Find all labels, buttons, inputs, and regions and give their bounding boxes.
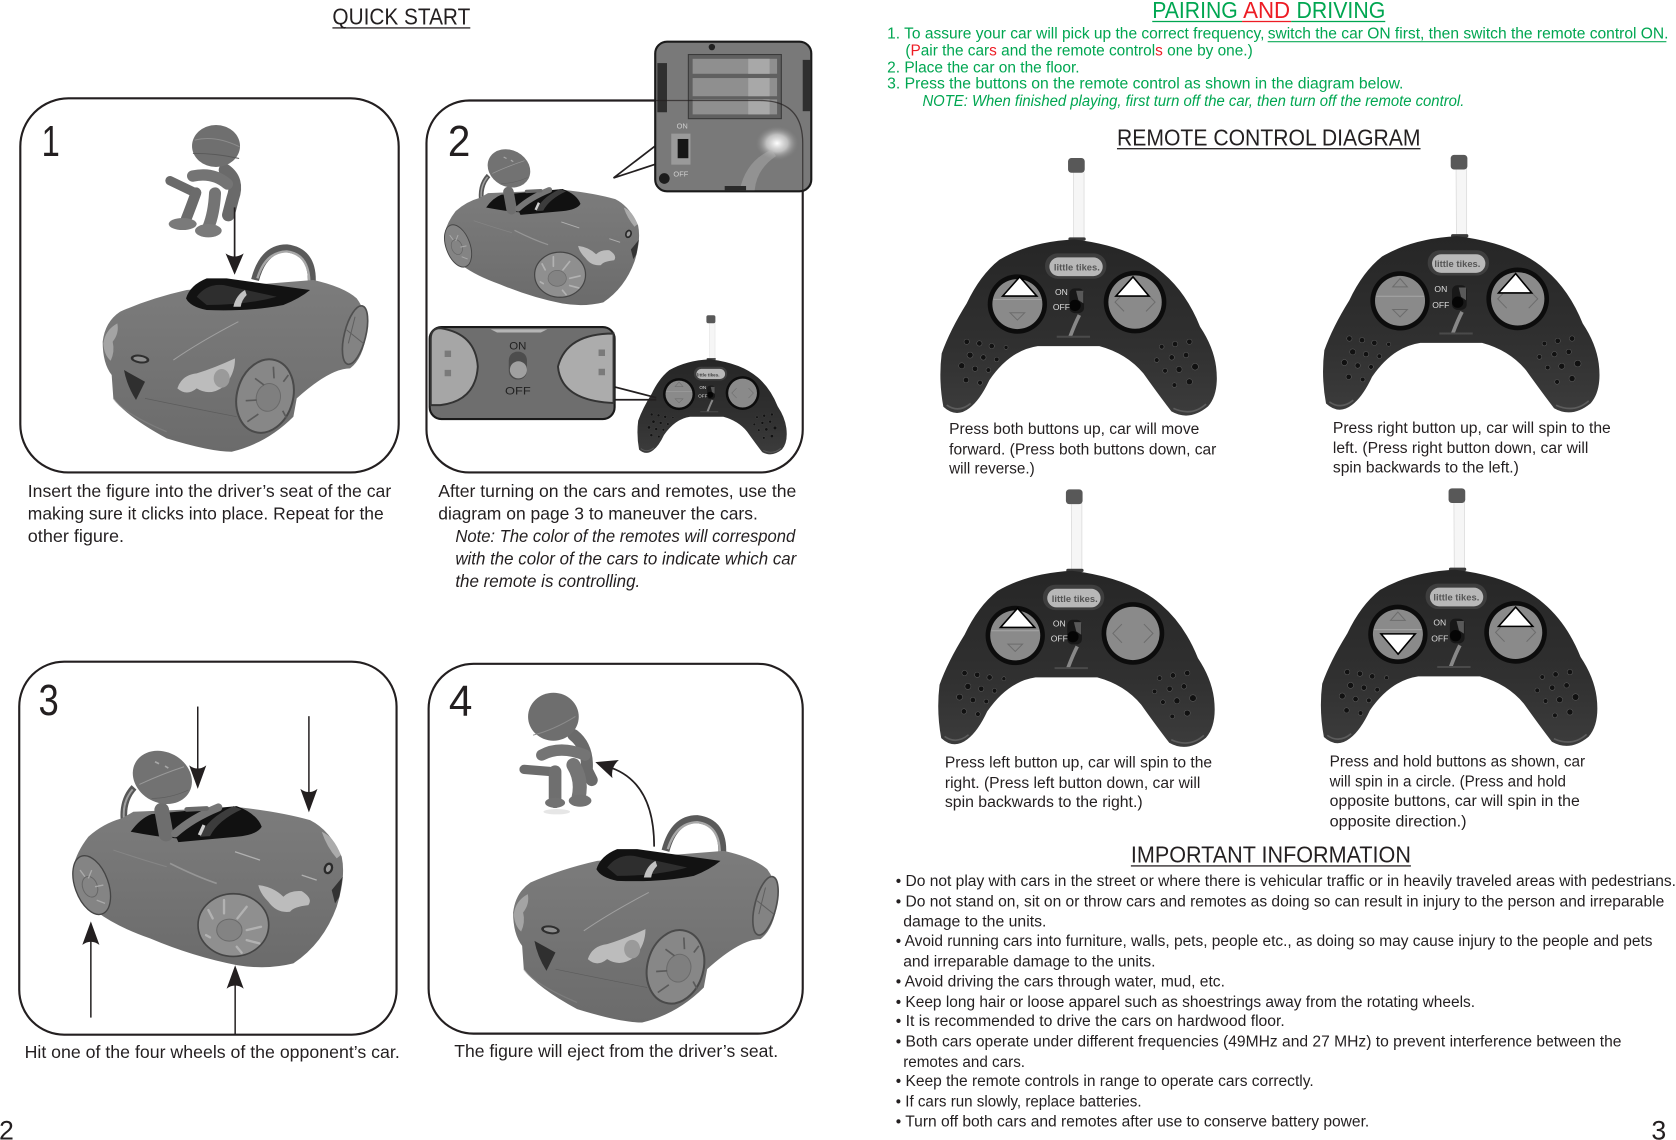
text: remote 4 caption: opposite buttons, car will spin in the [1330, 792, 1580, 810]
remote, step 2: OFF [698, 393, 708, 398]
heading: important information: IMPORTANT INFORMATION [1131, 842, 1411, 868]
text: remote 2 caption: Press right button up, car will spin to the [1333, 419, 1611, 437]
text: important information list: • Do not play with cars in the street or where there is vehicular traffic or in heavily traveled areas with pedestrians. [896, 872, 1676, 890]
text: remote 4 caption: will spin in a circle. (Press and hold [1329, 773, 1566, 791]
remote: left down, right up: OFF [1431, 633, 1448, 643]
remote: both buttons up: ON [1055, 287, 1068, 297]
text: step 2 caption: the remote is controlling. [455, 571, 640, 591]
arrows: four wheels [82, 707, 317, 1035]
text: important information list: • It is recommended to drive the cars on hardwood floor. [896, 1012, 1285, 1030]
text: pairing steps [887, 25, 1669, 110]
inset: battery compartment and switch [655, 42, 811, 191]
callout lines: battery inset [614, 144, 657, 178]
text: pairing steps: switch the car ON first, then switch the remote control ON. [1268, 25, 1669, 43]
car, step 4 [513, 819, 783, 1023]
arrow: figure into seat [226, 207, 244, 275]
text: important information list: remotes and cars. [903, 1053, 1025, 1071]
text: important information list: • If cars run slowly, replace batteries. [896, 1092, 1142, 1110]
panel 2 border showing through inset [655, 100, 803, 191]
text: step 2 caption: with the color of the cars to indicate which car [455, 548, 797, 568]
step number 4: 4 [449, 677, 472, 726]
text: step 4 caption: The figure will eject from the driver’s seat. [454, 1041, 778, 1061]
inset: remote on/off switch: OFF [505, 385, 531, 397]
text: step 1 caption: other figure. [28, 526, 124, 546]
panel: step 3 [19, 662, 397, 1035]
remote: right button up: OFF [1432, 300, 1449, 310]
callout lines: switch inset [615, 387, 656, 400]
text: important information list: • Turn off both cars and remotes after use to conserve battery power. [896, 1113, 1369, 1131]
panel: step 4 [429, 664, 803, 1034]
text: pairing steps: 1. To assure your car will pick up the correct frequency, [887, 25, 1264, 43]
text: important information list: • Keep long hair or loose apparel such as shoestrings away from the rotating wheels. [896, 993, 1475, 1011]
text: important information list [896, 872, 1676, 1131]
inset: remote on/off switch: ON [509, 341, 526, 353]
remote: right button up: ON [1434, 284, 1447, 294]
text: remote 4 caption [1329, 752, 1586, 830]
remote: both buttons up: OFF [1053, 302, 1070, 312]
remote: both buttons up: little tikes. [1054, 262, 1100, 273]
text: pairing steps: NOTE: When finished playing, first turn off the car, then turn off the remote control. [922, 92, 1464, 110]
text: step 2 caption [438, 481, 797, 591]
text: remote 2 caption: spin backwards to the left.) [1333, 458, 1519, 476]
text: step 3 caption: Hit one of the four wheels of the opponent’s car. [25, 1042, 400, 1062]
step number 3: 3 [38, 676, 59, 725]
text: remote 3 caption: spin backwards to the right.) [945, 793, 1143, 811]
text: remote 3 caption [945, 753, 1212, 811]
heading: pairing and driving [1152, 0, 1385, 23]
text: remote 1 caption: Press both buttons up, car will move [949, 420, 1199, 438]
remote: both buttons up [940, 158, 1217, 416]
step number 1: 1 [42, 117, 60, 166]
text: remote 2 caption: left. (Press right button down, car will [1333, 439, 1588, 457]
text: step 2 caption: After turning on the cars and remotes, use the [438, 481, 797, 501]
inset: battery compartment and switch: OFF [673, 169, 689, 178]
text: step 1 caption: making sure it clicks into place. Repeat for the [28, 503, 384, 523]
remote: right button up [1323, 155, 1599, 412]
panel: step 1 [20, 98, 399, 472]
remote, step 2: ON [699, 385, 706, 390]
text: remote 2 caption [1333, 419, 1611, 476]
text: remote 1 caption [948, 420, 1217, 478]
figure above car, step 1 [169, 125, 240, 237]
text: pairing steps: 2. Place the car on the floor. [887, 59, 1080, 77]
text: step 1 caption [28, 481, 391, 546]
text: important information list: • Both cars operate under different frequencies (49MHz and 27 MHz) to prevent interference between the [896, 1032, 1622, 1050]
text: remote 1 caption: forward. (Press both buttons down, car [949, 440, 1217, 458]
text: important information list: • Do not stand on, sit on or throw cars and remotes as doing so can result in injury to the person and irreparable [896, 892, 1664, 910]
remote: left down, right up: ON [1433, 617, 1446, 627]
remote, step 2: little tikes. [697, 373, 720, 378]
car, step 1 [103, 248, 373, 452]
text: remote 4 caption: Press and hold buttons as shown, car [1330, 752, 1586, 770]
text: step 2 caption: Note: The color of the remotes will correspond [455, 526, 796, 546]
arrow: figure ejects [595, 760, 654, 847]
text: important information list: • Keep the remote controls in range to operate cars correctly. [896, 1072, 1314, 1090]
text: important information list: • Avoid driving the cars through water, mud, etc. [896, 973, 1225, 991]
text: pairing steps: (Pair the cars and the remote controls one by one.) [905, 42, 1253, 60]
car with driver, step 2 [439, 142, 639, 305]
car with driver, step 3 [66, 741, 343, 967]
remote: right button up: little tikes. [1434, 259, 1481, 270]
text: remote 4 caption: opposite direction.) [1330, 812, 1466, 830]
remote: left down, right up [1321, 488, 1597, 746]
inset: battery compartment and switch: ON [677, 121, 688, 130]
remote, step 2 [637, 315, 787, 454]
text: important information list: • Avoid running cars into furniture, walls, pets, people etc., as doing so may cause injury to the people and pets [896, 932, 1652, 950]
ejected figure, step 4 [524, 693, 592, 814]
heading: remote control diagram: REMOTE CONTROL DIAGRAM [1117, 124, 1421, 150]
remote: left button up: little tikes. [1052, 594, 1098, 605]
text: remote 3 caption: Press left button up, car will spin to the [945, 753, 1212, 771]
text: important information list: and irreparable damage to the units. [903, 952, 1155, 970]
text: step 2 caption: diagram on page 3 to maneuver the cars. [438, 503, 758, 523]
remote: left button up: OFF [1051, 633, 1068, 643]
text: step 1 caption: Insert the figure into the driver’s seat of the car [28, 481, 391, 501]
text: pairing steps: 3. Press the buttons on the remote control as shown in the diagram below. [887, 75, 1403, 93]
remote: left down, right up: little tikes. [1433, 593, 1480, 604]
text: remote 3 caption: right. (Press left button down, car will [945, 774, 1200, 792]
text: important information list: damage to the units. [903, 913, 1046, 931]
step number 2: 2 [448, 117, 470, 166]
inset: remote on/off switch [430, 327, 615, 419]
panel: step 2 [426, 100, 803, 472]
remote: left button up [938, 489, 1215, 747]
page heading: quick start: QUICK START [332, 4, 470, 30]
text: remote 1 caption: will reverse.) [948, 460, 1035, 478]
remote: left button up: ON [1053, 618, 1066, 628]
